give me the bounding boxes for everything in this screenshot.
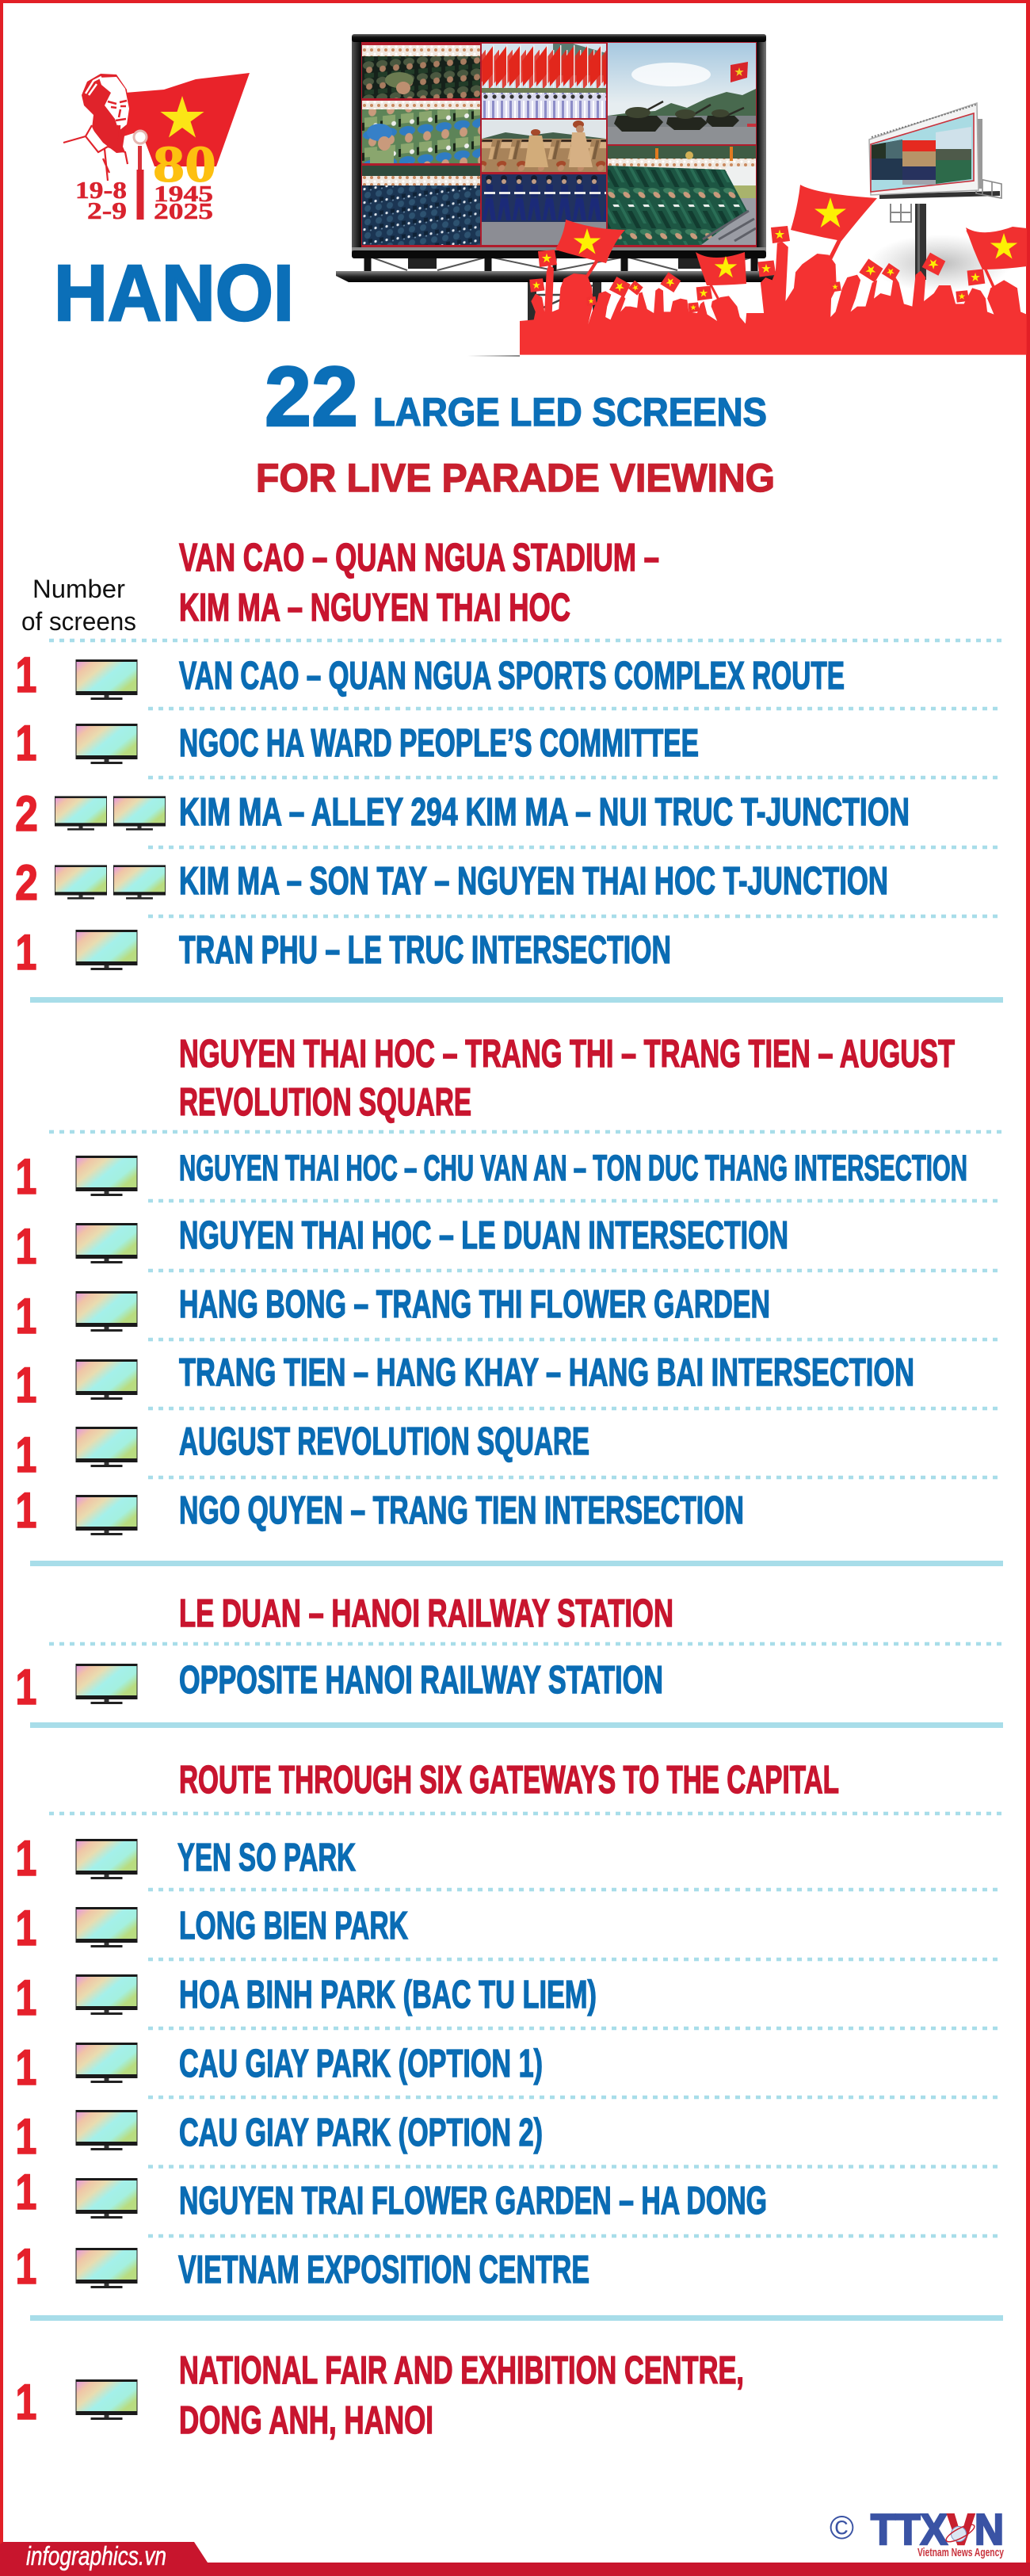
flag with star: [124, 73, 250, 166]
row: Le Duan intersection: 1: [16, 1219, 36, 1275]
row: Ngo Quyen: [16, 1483, 744, 1538]
section heading: [179, 1033, 955, 1124]
row: Tran Phu: TRAN PHU – LE TRUC INTERSECTION: [179, 929, 671, 972]
row: Yen So Park: [16, 1831, 356, 1886]
column label: number of screens: Number: [32, 575, 125, 603]
row: Hoa Binh Park: [16, 1970, 597, 2026]
row: opposite railway station: [16, 1659, 663, 1715]
row: Kim Ma alley 294: [15, 786, 910, 842]
row: Cau Giay Park option 2: CAU GIAY PARK (OPTION 2): [179, 2112, 543, 2154]
row: Vietnam Exposition Centre: [16, 2239, 589, 2295]
section heading: REVOLUTION SQUARE: [179, 1081, 471, 1124]
row: Van Cao sports complex: 1: [16, 648, 36, 703]
dates left: 19-8: [75, 176, 127, 204]
photo: tan uniform soldiers: [482, 120, 606, 172]
section 5: National Fair and Exhibition Centre: 1: [16, 2375, 36, 2430]
photo: tanks: [608, 43, 756, 144]
row: Ngoc Ha ward: [16, 716, 699, 771]
section 4: six gateways to the capital: [16, 1759, 1003, 2295]
section 5: National Fair and Exhibition Centre: [16, 2349, 744, 2442]
row: Yen So Park: YEN SO PARK: [177, 1836, 356, 1879]
section 2: Nguyen Thai Hoc to August Revolution Square: [16, 1033, 1003, 1538]
column label: number of screens: of screens: [21, 607, 136, 636]
crowd silhouette with flags: [467, 185, 1027, 357]
row: Cau Giay Park option 2: [16, 2109, 543, 2165]
row: Yen So Park: 1: [16, 1831, 36, 1886]
section heading: VAN CAO – QUAN NGUA STADIUM –: [179, 537, 659, 579]
small distant billboard: [869, 103, 1012, 292]
footer bar: [0, 2563, 1030, 2576]
row: Van Cao sports complex: [16, 648, 845, 703]
row: Le Duan intersection: [16, 1214, 788, 1275]
years right: [154, 182, 213, 224]
crowd figures and base: [520, 242, 1027, 355]
headline: for live parade viewing: FOR LIVE PARADE VIEWING: [256, 456, 775, 500]
screen backing: [361, 42, 757, 247]
row: Ngoc Ha ward: 1: [16, 716, 36, 771]
flag: middle: [696, 252, 746, 300]
section heading: LE DUAN – HANOI RAILWAY STATION: [179, 1592, 673, 1635]
row: Long Bien Park: 1: [16, 1901, 36, 1956]
row: Hang Bong: HANG BONG – TRANG THI FLOWER GARDEN: [179, 1283, 770, 1326]
row: Vietnam Exposition Centre: VIETNAM EXPOSITION CENTRE: [178, 2249, 589, 2291]
section heading: [179, 537, 659, 629]
row: Cau Giay Park option 1: [16, 2040, 543, 2096]
photo: green uniform marchers: [608, 146, 756, 245]
row: Ngo Quyen: 1: [16, 1483, 36, 1538]
dates left: [75, 176, 127, 224]
section 3: Le Duan to Hanoi railway station: [16, 1592, 1003, 1715]
row: Hang Bong: 1: [16, 1289, 36, 1344]
row: Nguyen Trai flower garden: 1: [16, 2165, 36, 2220]
headline number 22: 22: [265, 349, 358, 444]
dates left: 2-9: [87, 197, 127, 224]
row: Cau Giay Park option 2: 1: [16, 2109, 36, 2165]
row: opposite railway station: 1: [16, 1660, 36, 1715]
venue name: NATIONAL FAIR AND EXHIBITION CENTRE,: [179, 2349, 744, 2392]
shadow under crowd: [467, 355, 520, 357]
main billboard: [336, 34, 776, 325]
photo: red flags: [482, 44, 606, 118]
row: Ngo Quyen: NGO QUYEN – TRANG TIEN INTERSECTION: [179, 1489, 744, 1532]
row: Hoa Binh Park: HOA BINH PARK (BAC TU LIEM): [179, 1974, 597, 2016]
years right: 2025: [154, 199, 213, 224]
row: Hang Bong: [16, 1283, 770, 1344]
photo: blue berets: [362, 101, 480, 163]
microphone: [134, 131, 147, 220]
row: August Revolution Square: [16, 1420, 589, 1483]
section 1: Van Cao to Nguyen Thai Hoc: [15, 537, 1003, 980]
large flag: centre: [791, 185, 877, 258]
place title: HANOI: HANOI: [54, 249, 294, 338]
row: opposite railway station: OPPOSITE HANOI RAILWAY STATION: [179, 1659, 663, 1702]
column label: number of screens: [21, 575, 136, 636]
row: Kim Ma Son Tay: [15, 855, 888, 911]
row: August Revolution Square: 1: [16, 1428, 36, 1483]
agency logo: TTXVN: TTXVN: [871, 2505, 1004, 2554]
photo: green soldiers: [362, 45, 480, 98]
frame: [352, 34, 766, 256]
support legs and truss: [366, 251, 756, 325]
row: Trang Tien: [16, 1351, 914, 1413]
years right: 1945: [154, 182, 213, 207]
venue name: [179, 2349, 744, 2442]
row: Tran Phu: 1: [16, 925, 36, 980]
venue name: DONG ANH, HANOI: [179, 2399, 433, 2442]
number 80: 80: [153, 136, 216, 193]
small waving flags: [529, 226, 985, 313]
row: Nguyen Trai flower garden: [16, 2165, 767, 2222]
row: Chu Van An: 1: [16, 1149, 36, 1205]
row: August Revolution Square: AUGUST REVOLUTION SQUARE: [179, 1420, 589, 1463]
footer tab: infographics.vn: infographics.vn: [26, 2541, 166, 2570]
row: Chu Van An: [16, 1148, 967, 1205]
section heading: KIM MA – NGUYEN THAI HOC: [179, 587, 570, 629]
row: Nguyen Trai flower garden: NGUYEN TRAI FLOWER GARDEN – HA DONG: [179, 2180, 767, 2222]
copyright symbol: ©: [830, 2509, 854, 2546]
logo: 80th anniversary emblem: [63, 73, 250, 224]
lower bar: [336, 271, 776, 282]
row: Vietnam Exposition Centre: 1: [16, 2239, 36, 2295]
row: Ngoc Ha ward: NGOC HA WARD PEOPLE’S COMMITTEE: [179, 722, 699, 765]
row: Cau Giay Park option 1: CAU GIAY PARK (OPTION 1): [179, 2043, 543, 2085]
row: Kim Ma alley 294: 2: [15, 786, 38, 842]
photo: navy dress uniform: [482, 174, 606, 245]
row: Long Bien Park: [16, 1901, 408, 1956]
photo: navy camo soldiers: [362, 166, 480, 245]
portrait silhouette: [63, 74, 129, 181]
row: Tran Phu: [16, 925, 671, 980]
row: Trang Tien: 1: [16, 1358, 36, 1413]
row: Hoa Binh Park: 1: [16, 1970, 36, 2026]
row: Kim Ma Son Tay: 2: [15, 855, 38, 911]
headline: large LED screens: LARGE LED SCREENS: [373, 390, 767, 434]
row: Cau Giay Park option 1: 1: [16, 2040, 36, 2096]
flag: far right: [966, 227, 1027, 287]
large flag: left: [555, 220, 625, 277]
row: Long Bien Park: LONG BIEN PARK: [179, 1905, 408, 1947]
